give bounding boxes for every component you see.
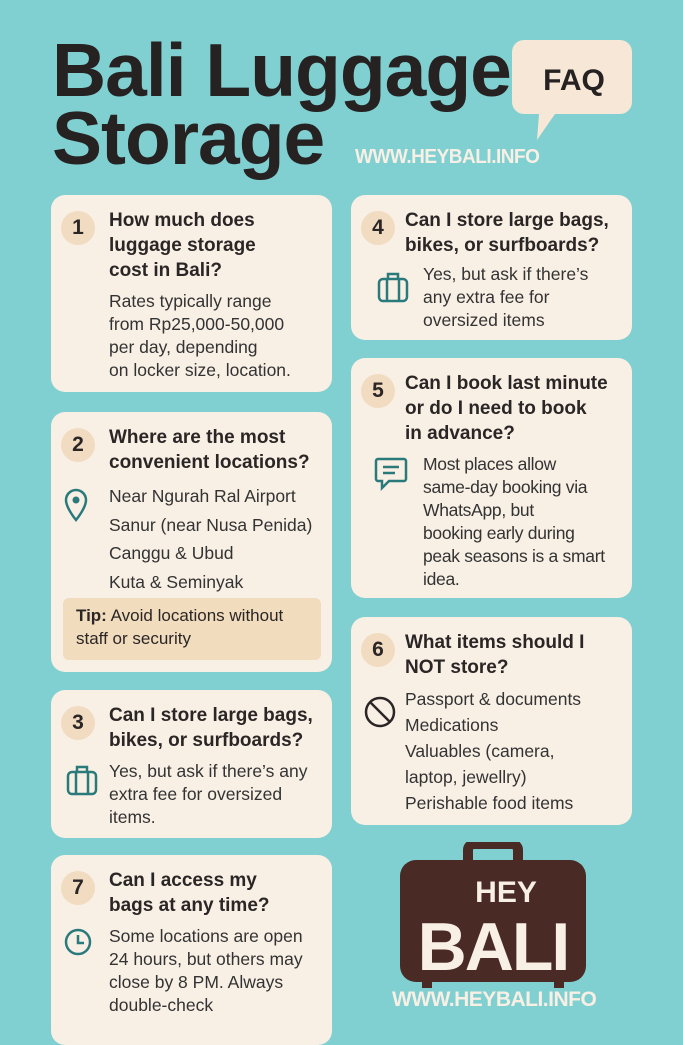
panel: card 2: 2 [72, 433, 84, 456]
website url top: WWW.HEYBALI.INFO [355, 146, 539, 168]
panel: card 5: idea. [423, 569, 459, 589]
panel: card 2: Where are the most [109, 427, 285, 448]
panel: card 6 [351, 617, 632, 825]
panel: card 7: close by 8 PM. Always [109, 972, 283, 992]
panel: card 6: 6 [372, 638, 384, 661]
panel: card 5: WhatsApp, but [423, 500, 534, 520]
panel: card 6: Valuables (camera, [405, 741, 554, 761]
panel: card 1: luggage storage [109, 235, 256, 256]
FAQ speech bubble [512, 40, 632, 140]
panel: card 7: 24 hours, but others may [109, 949, 303, 969]
panel: card 3 [51, 690, 332, 838]
panel: card 4: Yes, but ask if there’s [423, 264, 588, 284]
panel: card 5: booking early during [423, 523, 575, 543]
panel: card 5: Can I book last minute [405, 373, 608, 394]
panel: card 3: Can I store large bags, [109, 705, 313, 726]
panel: card 2 [51, 412, 332, 672]
icon: clock [64, 928, 92, 956]
panel: card 1: cost in Bali? [109, 260, 222, 281]
icon: suitcase [378, 272, 408, 302]
panel: card 6: laptop, jewellry) [405, 767, 527, 787]
panel: card 5 [351, 358, 632, 598]
panel: card 6: NOT store? [405, 657, 508, 678]
icon: chat bubble [374, 458, 408, 491]
panel: card 6: Passport & documents [405, 689, 581, 709]
title [52, 28, 511, 180]
panel: card 5: peak seasons is a smart [423, 546, 605, 566]
logo: Hey Bali suitcase: BALI [418, 909, 568, 985]
panel: card 2: Near Ngurah Ral Airport [109, 486, 296, 506]
panel: card 4: 4 [372, 216, 384, 239]
panel: card 5: 5 [372, 379, 384, 402]
panel: card 5: same-day booking via [423, 477, 587, 497]
panel: card 1: from Rp25,000-50,000 [109, 314, 284, 334]
panel: card 3: items. [109, 807, 156, 827]
panel: card 2: Kuta & Seminyak [109, 572, 243, 592]
panel: card 4: oversized items [423, 310, 545, 330]
panel: card 2: Canggu & Ubud [109, 543, 234, 563]
panel: card 7: Can I access my [109, 870, 257, 891]
logo: Hey Bali suitcase: HEY [475, 876, 537, 909]
panel: card 1 [51, 195, 332, 392]
panel: card 3: bikes, or surfboards? [109, 730, 303, 751]
panel: card 4 [351, 195, 632, 340]
panel: card 7: bags at any time? [109, 895, 270, 916]
panel: card 4: Can I store large bags, [405, 210, 609, 231]
tip box: Tip: Avoid locations without staff or security [76, 606, 283, 648]
panel: card 1: How much does [109, 210, 255, 231]
panel: card 1: on locker size, location. [109, 360, 291, 380]
panel: card 1: 1 [72, 216, 84, 239]
title: Bali Luggage [52, 28, 511, 112]
logo: Hey Bali suitcase [400, 842, 586, 988]
panel: card 3: Yes, but ask if there’s any [109, 761, 307, 781]
panel: card 4: bikes, or surfboards? [405, 235, 599, 256]
panel: card 3: extra fee for oversized [109, 784, 282, 804]
icon: suitcase [66, 766, 98, 796]
panel: card 1: Rates typically range [109, 291, 271, 311]
panel: card 3: 3 [72, 711, 84, 734]
panel: card 5: Most places allow [423, 454, 556, 474]
FAQ speech bubble: FAQ [543, 64, 605, 97]
panel: card 7 [51, 855, 332, 1045]
panel: card 2: Sanur (near Nusa Penida) [109, 514, 312, 534]
panel: card 7: Some locations are open [109, 926, 303, 946]
panel: card 1: per day, depending [109, 337, 258, 357]
panel: card 7: 7 [72, 876, 84, 899]
panel: card 6: Medications [405, 715, 498, 735]
title: Storage [52, 96, 324, 180]
panel: card 2: convenient locations? [109, 452, 310, 473]
panel: card 7: double-check [109, 995, 213, 1015]
tip box [63, 598, 321, 660]
icon: location pin [64, 488, 88, 522]
panel: card 5: in advance? [405, 423, 515, 444]
panel: card 6: What items should I [405, 632, 584, 653]
panel: card 4: any extra fee for [423, 287, 549, 307]
icon: prohibited [364, 696, 396, 728]
website url bottom: WWW.HEYBALI.INFO [392, 988, 596, 1011]
panel: card 6: Perishable food items [405, 793, 573, 813]
panel: card 5: or do I need to book [405, 398, 587, 419]
